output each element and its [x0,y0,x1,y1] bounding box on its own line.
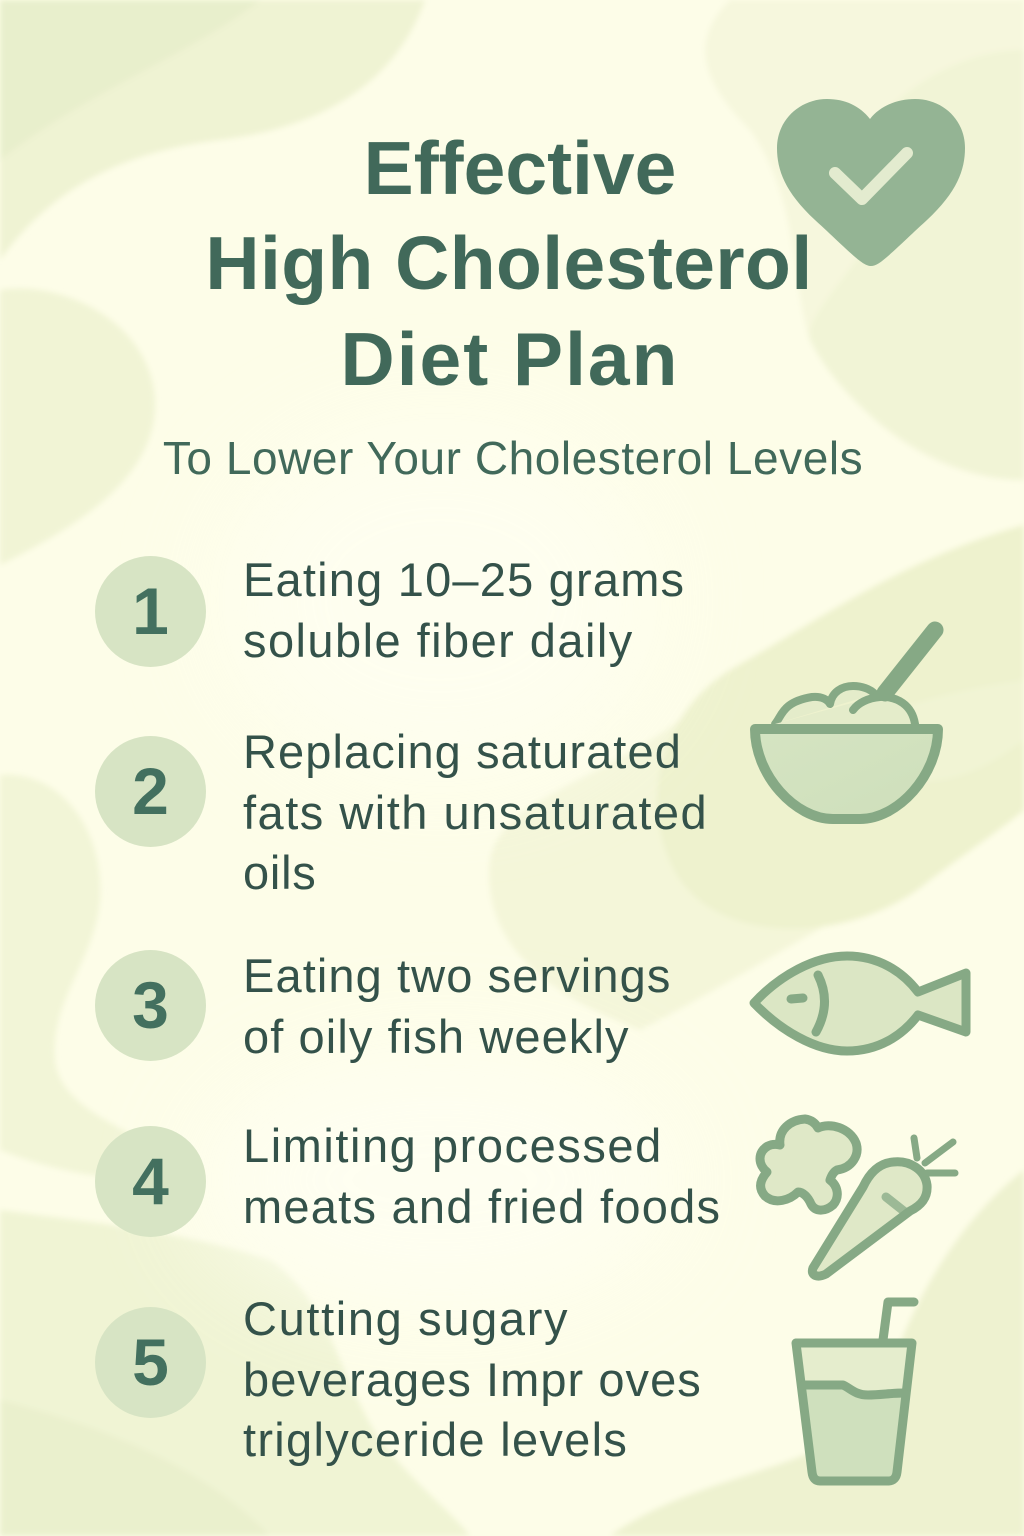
number badge 4 [95,1126,206,1237]
title: High Cholesterol [205,221,813,305]
step 5 [95,1292,702,1466]
number badge 1: 1 [132,574,169,648]
step 4 text: Limiting processed [243,1119,663,1172]
step 3 text: Eating two servings [243,949,671,1002]
title: Diet Plan [341,317,679,401]
step 1 text: Eating 10–25 grams [243,553,685,606]
number badge 1 [95,556,206,667]
step 2 text [243,725,708,899]
step 5 text: beverages Impr oves [243,1352,702,1406]
number badge 4: 4 [132,1144,169,1218]
step 2 text: Replacing saturated [243,725,682,778]
number badge 5 [95,1307,206,1418]
number badge 5: 5 [132,1325,169,1399]
number badge 2 [95,736,206,847]
step 5 text: Cutting sugary [243,1292,569,1345]
number badge 3 [95,950,206,1061]
step 5 text [243,1292,702,1466]
icon: fish [750,952,970,1056]
step 3 text: of oily fish weekly [243,1010,630,1062]
step 3 text [243,949,671,1063]
step 2 [95,725,708,899]
step 2 text: fats with unsaturated [243,786,708,838]
icon: broccoli and carrot [756,1114,958,1281]
step 4 [95,1119,721,1237]
number badge 2: 2 [132,754,169,828]
step 5 text: triglyceride levels [243,1413,628,1466]
step 3 [95,949,671,1063]
step 1 text: soluble fiber daily [243,614,634,666]
icon: glass with straw [792,1298,918,1486]
title [205,126,813,401]
step 1 [95,553,685,667]
title: Effective [364,126,676,210]
step 4 text: meats and fried foods [243,1180,721,1232]
subtitle: To Lower Your Cholesterol Levels [163,432,863,484]
step 1 text [243,553,685,667]
step 2 text: oils [243,846,317,899]
icon: heart with check [777,99,965,266]
step 4 text [243,1119,721,1232]
icon: bowl with spoon [750,622,944,824]
number badge 3: 3 [132,968,169,1042]
